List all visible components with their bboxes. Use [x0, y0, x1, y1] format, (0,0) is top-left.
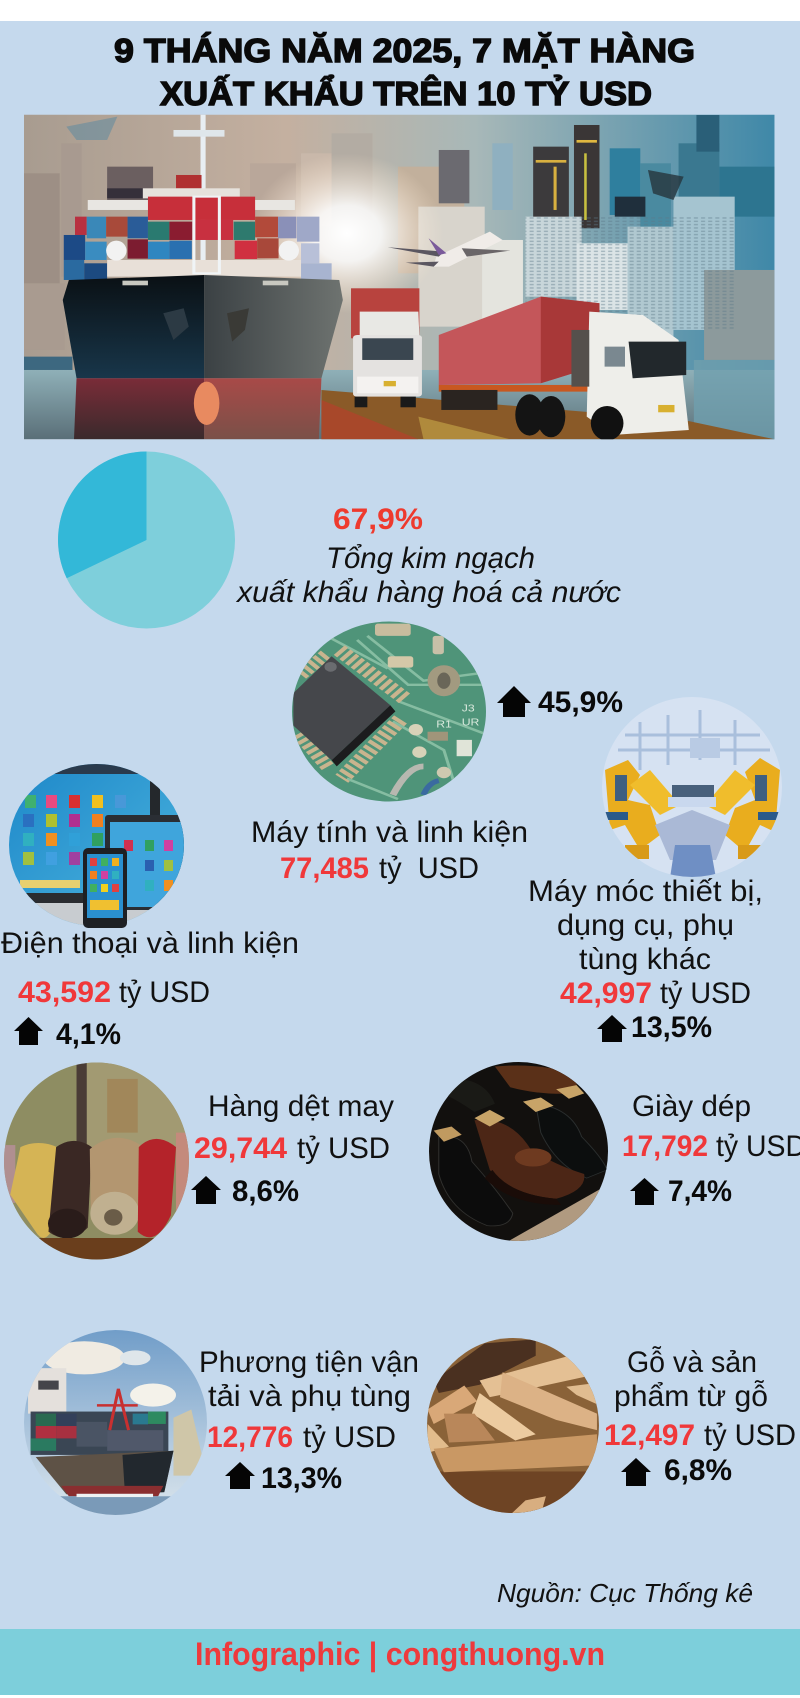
road	[321, 390, 774, 439]
rear truck with red container	[439, 297, 689, 441]
footer band	[0, 1629, 800, 1695]
pie value and label: Tổng kim ngạch	[326, 542, 535, 575]
label: machinery	[528, 875, 763, 1010]
source note: Nguồn: Cục Thống kê	[497, 1578, 753, 1608]
image: container ship	[20, 1327, 209, 1521]
harbour water	[24, 370, 774, 439]
image: fabric rolls	[0, 1058, 194, 1265]
arrow and growth: textiles	[191, 1175, 299, 1208]
arrow and growth: wood: 6,8%	[664, 1454, 732, 1487]
title: XUẤT KHẨU TRÊN 10 TỶ USD	[160, 75, 652, 112]
label: textiles: Hàng dệt may	[208, 1090, 394, 1123]
label: phones	[1, 927, 299, 1009]
title: 9 THÁNG NĂM 2025, 7 MẶT HÀNG	[114, 32, 695, 69]
label: phones: tỷ USD	[119, 976, 210, 1009]
label: computers: Máy tính và linh kiện	[251, 816, 528, 849]
arrow and growth: phones: 4,1%	[56, 1018, 121, 1051]
ship hull	[63, 275, 343, 439]
airplane	[388, 232, 510, 267]
image: circuit board chip: R1	[436, 720, 452, 730]
arrow and growth: machinery	[597, 1011, 712, 1044]
arrow and growth: textiles: 8,6%	[232, 1175, 299, 1208]
label: wood: Gỗ và sản	[627, 1346, 757, 1379]
city skyline	[24, 115, 774, 360]
ship superstructure and containers	[64, 115, 332, 280]
label: machinery: tỷ USD	[660, 977, 751, 1010]
sun glow	[260, 160, 428, 306]
pie value and label: 67,9%	[333, 503, 423, 536]
arrow and growth: footwear: 7,4%	[668, 1175, 732, 1208]
arrow and growth: computers	[497, 686, 623, 719]
label: phones: Điện thoại và linh kiện	[1, 927, 299, 960]
label: machinery: dụng cụ, phụ	[557, 909, 734, 942]
label: vehicles: Phương tiện vận	[199, 1346, 419, 1379]
label: footwear: Giày dép	[632, 1090, 751, 1123]
label: footwear: 17,792	[622, 1130, 708, 1163]
label: computers	[251, 816, 528, 885]
arrow and growth: vehicles: 13,3%	[261, 1462, 342, 1495]
front truck	[351, 288, 422, 407]
image: factory robots	[600, 695, 784, 879]
arrow and growth: computers: 45,9%	[538, 686, 623, 719]
pie value and label	[235, 503, 621, 609]
image: leather shoes	[426, 1058, 612, 1244]
hero image: ship, plane, trucks and city	[24, 115, 774, 441]
label: footwear	[622, 1090, 800, 1163]
arrow and growth: vehicles	[225, 1462, 342, 1495]
image: tablet, laptop and phone	[5, 760, 190, 930]
label: wood: phẩm từ gỗ	[614, 1380, 768, 1413]
arrow and growth: footwear	[630, 1175, 732, 1208]
label: wood: tỷ USD	[704, 1419, 796, 1452]
label: wood: 12,497	[604, 1419, 695, 1452]
label: vehicles: 12,776	[207, 1421, 293, 1454]
label: machinery: tùng khác	[579, 943, 711, 976]
image: circuit board chip: J3	[462, 703, 475, 714]
label: computers: tỷ USD	[379, 852, 479, 885]
image: circuit board chip	[290, 620, 490, 805]
arrow and growth: phones	[14, 1017, 121, 1051]
label: phones: 43,592	[18, 976, 111, 1009]
label: machinery: 42,997	[560, 977, 652, 1010]
label: wood	[604, 1346, 796, 1452]
label: textiles: tỷ USD	[297, 1132, 390, 1165]
label: vehicles: tỷ USD	[303, 1421, 396, 1454]
label: vehicles	[199, 1346, 419, 1454]
image: chopped wood	[423, 1335, 602, 1517]
label: vehicles: tải và phụ tùng	[208, 1380, 411, 1413]
title	[114, 32, 695, 112]
pie chart: 67.9% share	[58, 452, 235, 628]
arrow and growth: wood	[621, 1454, 732, 1487]
arrow and growth: machinery: 13,5%	[631, 1011, 712, 1044]
label: computers: 77,485	[280, 852, 369, 885]
label: machinery: Máy móc thiết bị,	[528, 875, 763, 908]
image: circuit board chip: UR	[462, 718, 479, 728]
label: textiles: 29,744	[194, 1132, 287, 1165]
footer band: Infographic | congthuong.vn	[195, 1636, 605, 1672]
label: textiles	[194, 1090, 394, 1165]
pie value and label: xuất khẩu hàng hoá cả nước	[235, 576, 621, 609]
